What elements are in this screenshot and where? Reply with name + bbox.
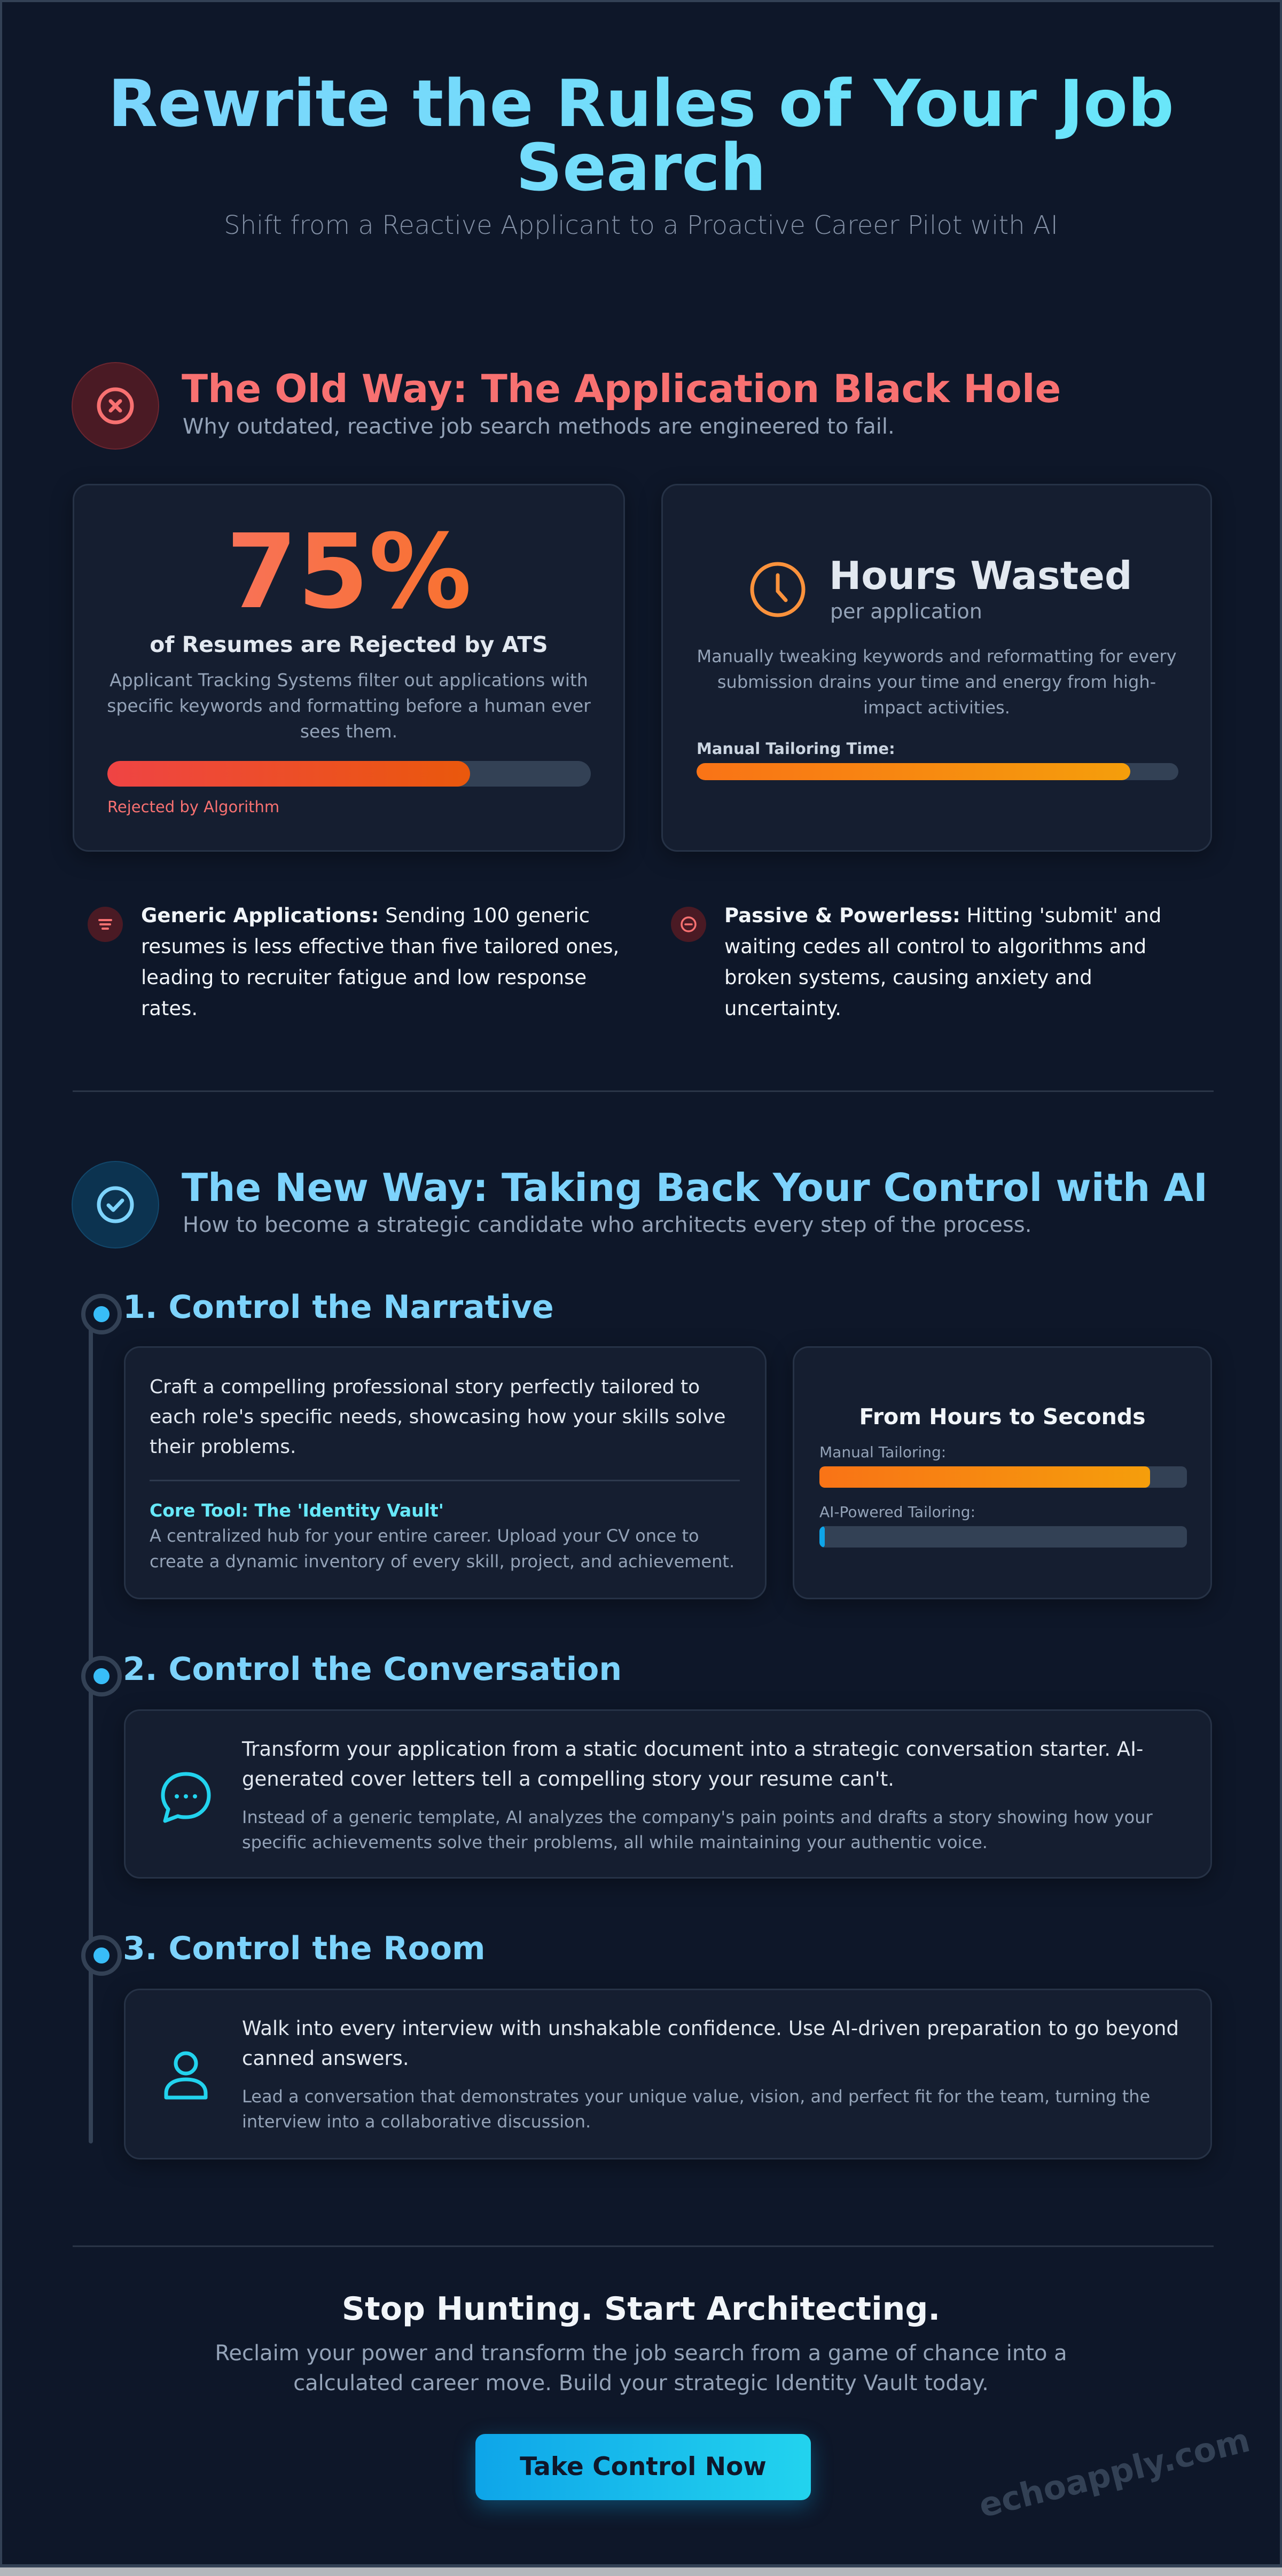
core tool label: Core Tool: The 'Identity Vault' [150, 1500, 444, 1521]
panel: 75% rejected [73, 484, 625, 852]
subheading: new way: How to become a strategic candidate who architects every step of the process. [183, 1213, 1031, 1237]
bar ai [819, 1526, 1187, 1548]
icon: list [88, 907, 123, 942]
icon: chat bubble [161, 1772, 210, 1823]
icon: old way x [72, 362, 159, 450]
panel: hours wasted [661, 484, 1212, 852]
description: impact activities. [863, 697, 1010, 718]
label manual: Manual Tailoring: [819, 1443, 946, 1461]
text: Walk into every interview with unshakable confidence. Use AI-driven preparation to go beyond canned answers. [242, 2017, 1179, 2070]
bar label: Manual Tailoring Time: [697, 740, 895, 758]
bullet: passive & powerless [671, 904, 1161, 1020]
subtext: Instead of a generic template, AI analyzes the company's pain points and drafts a story showing how your specific achievements solve their problems, all while maintaining your authentic voice. [242, 1807, 1153, 1852]
timeline dot 1 [81, 1294, 122, 1334]
bar: manual time [697, 763, 1178, 780]
cta button [475, 2434, 811, 2500]
heading: new way: The New Way: Taking Back Your Control with AI [182, 1165, 1208, 1210]
heading: hours wasted: Hours Wasted [829, 553, 1132, 598]
panel: room [124, 1989, 1212, 2159]
text: Generic Applications: Sending 100 generic resumes is less effective than five tailored ones, leading to recruiter fatigue and low response rates. [141, 904, 619, 1020]
icon: new way check [72, 1161, 159, 1248]
description: submission drains your time and energy from high- [717, 672, 1156, 692]
label ai: AI-Powered Tailoring: [819, 1503, 975, 1521]
subtext: Lead a conversation that demonstrates your unique value, vision, and perfect fit for the team, turning the interview into a collaborative discussion. [242, 2086, 1150, 2132]
cta heading: Stop Hunting. Start Architecting. [342, 2290, 940, 2328]
panel: narrative [124, 1346, 767, 1599]
description [697, 646, 1177, 718]
chart title: From Hours to Seconds [859, 1404, 1146, 1430]
bar label: Rejected by Algorithm [107, 798, 279, 816]
heading: old way: The Old Way: The Application Black Hole [182, 366, 1061, 411]
icon: minus circle [671, 907, 706, 942]
title: Rewrite the Rules of Your Job [108, 66, 1174, 142]
icon: clock [750, 562, 806, 617]
description: Applicant Tracking Systems filter out applications with specific keywords and formatting before a human ever sees them. [107, 670, 591, 742]
bar manual [819, 1466, 1187, 1488]
description: Manually tweaking keywords and reformatting for every [697, 646, 1177, 666]
sub: per application: per application [830, 600, 982, 623]
cta text: Reclaim your power and transform the job search from a game of chance into a calculated career move. Build your strategic Identity Vault today. [215, 2341, 1067, 2396]
text: Craft a compelling professional story perfectly tailored to each role's specific needs, showcasing how your skills solve their problems. [150, 1376, 726, 1458]
bullet: generic applications [88, 904, 619, 1020]
stat label: of Resumes are Rejected by ATS [150, 632, 548, 657]
text: Transform your application from a static document into a strategic conversation starter. AI-generated cover letters tell a compelling story your resume can't. [242, 1738, 1143, 1790]
subheading: old way: Why outdated, reactive job search methods are engineered to fail. [183, 414, 895, 439]
text: Passive & Powerless: Hitting 'submit' and waiting cedes all control to algorithms and broken systems, causing anxiety and uncertainty. [724, 904, 1161, 1020]
stat 75%: 75% [226, 513, 472, 632]
stat 75% [74, 516, 623, 629]
panel: hours to seconds chart [793, 1346, 1212, 1599]
step 1 heading: 1. Control the Narrative [123, 1289, 554, 1326]
cta button: Take Control Now [520, 2452, 767, 2481]
timeline line [89, 1316, 93, 2143]
bar: rejected [107, 761, 591, 787]
subtitle: Shift from a Reactive Applicant to a Proactive Career Pilot with AI [224, 210, 1058, 240]
step 3 heading: 3. Control the Room [123, 1930, 485, 1967]
step 2 heading: 2. Control the Conversation [123, 1651, 622, 1688]
icon: person [165, 2052, 207, 2100]
core tool desc: A centralized hub for your entire career. Upload your CV once to create a dynamic inventory of every skill, project, and achievement. [150, 1526, 734, 1572]
panel: conversation [124, 1709, 1212, 1879]
watermark: echoapply.com [975, 2420, 1254, 2525]
title [2, 72, 1280, 200]
title: Search [516, 130, 766, 206]
timeline dot 3 [81, 1935, 122, 1976]
timeline dot 2 [81, 1656, 122, 1697]
